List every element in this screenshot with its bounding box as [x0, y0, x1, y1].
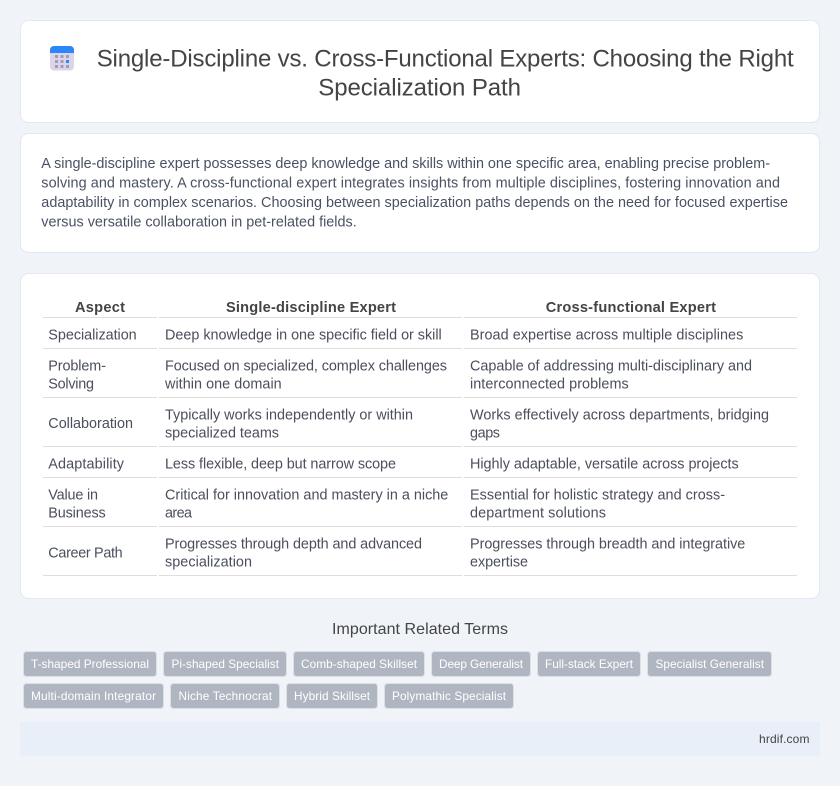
table row: Value in Business: Business — [48, 505, 106, 521]
chip: Pi-shaped Specialist: Pi-shaped Specialist — [172, 657, 280, 671]
table row: Problem-Solving: Problem- — [48, 358, 106, 374]
table row: Career Path: specialization — [165, 554, 252, 570]
table header row: Aspect — [75, 300, 125, 316]
chip: Polymathic Specialist — [384, 684, 514, 708]
table row: Problem-Solving: Focused on specialized, complex challenges — [165, 358, 447, 374]
table row: Career Path: Progresses through breadth and integrative — [470, 536, 745, 552]
text block: introduction paragraph: A single-discipline expert possesses deep knowledge and skills within one specific area, enabling precise problem- — [41, 156, 770, 172]
heading: Important Related Terms: Important Related Terms — [332, 621, 508, 638]
table row: Adaptability: Highly adaptable, versatile across projects — [470, 456, 739, 472]
chip: T-shaped Professional: T-shaped Professional — [31, 657, 149, 671]
text block: introduction paragraph: versus versatile collaboration in pet-related fields. — [41, 214, 357, 230]
title: Single-Discipline vs. Cross-Functional Experts: Choosing the Right — [97, 46, 794, 72]
table row: Value in Business: Essential for holistic strategy and cross- — [470, 487, 725, 503]
panel: introduction — [20, 134, 820, 252]
icon: calendar — [50, 46, 74, 70]
title — [97, 46, 794, 102]
table row: Specialization: Deep knowledge in one specific field or skill — [165, 327, 442, 343]
chip: Deep Generalist — [432, 652, 530, 676]
text block: introduction paragraph: adaptability in complex scenarios. Choosing between specialization paths depends on the need for focused expertise — [41, 195, 788, 211]
chip: Multi-domain Integrator — [24, 684, 164, 708]
table header row — [43, 300, 797, 318]
chip: Multi-domain Integrator: Multi-domain Integrator — [31, 689, 156, 703]
chip: Full-stack Expert: Full-stack Expert — [545, 657, 634, 671]
text block: introduction paragraph: solving and mastery. A cross-functional expert integrates insights from multiple disciplines, fostering innovation and — [41, 176, 780, 192]
table row: Value in Business: area — [165, 505, 192, 521]
chip: Full-stack Expert — [538, 652, 640, 676]
table row: Collaboration: gaps — [470, 425, 500, 441]
table row: Problem-Solving — [43, 358, 797, 398]
panel: header — [20, 20, 820, 122]
table row: Specialization — [43, 327, 797, 349]
table row: Collaboration: Typically works independently or within — [165, 407, 413, 423]
chip: Specialist Generalist: Specialist Generalist — [656, 657, 765, 671]
table row: Problem-Solving: Capable of addressing multi-disciplinary and — [470, 358, 752, 374]
table row: Specialization: Broad expertise across multiple disciplines — [470, 327, 743, 343]
table row: Value in Business: department solutions — [470, 505, 606, 521]
table row: Problem-Solving: within one domain — [164, 376, 282, 392]
table row: Collaboration: specialized teams — [165, 425, 279, 441]
chip: Niche Technocrat — [170, 684, 280, 708]
table row: Specialization: Specialization — [48, 327, 137, 343]
title: Specialization Path — [318, 74, 521, 102]
table row: Problem-Solving: Solving — [48, 376, 94, 392]
table row: Career Path: Progresses through depth and advanced — [165, 536, 422, 552]
table row: Adaptability — [43, 456, 797, 478]
text block: introduction paragraph — [41, 156, 788, 230]
chip: Niche Technocrat: Niche Technocrat — [178, 689, 273, 703]
table row: Adaptability: Adaptability — [48, 456, 125, 472]
table row: Value in Business: Critical for innovation and mastery in a niche — [165, 487, 448, 503]
chip: Comb-shaped Skillset: Comb-shaped Skillset — [301, 657, 418, 671]
chip: Polymathic Specialist: Polymathic Specialist — [392, 689, 507, 703]
footer band — [20, 722, 820, 756]
table row: Collaboration: Collaboration — [48, 416, 133, 432]
table header row: Single-discipline Expert — [226, 300, 396, 316]
chip: T-shaped Professional — [24, 652, 156, 676]
chip: Hybrid Skillset: Hybrid Skillset — [294, 689, 371, 703]
footer text: hrdif.com: hrdif.com — [759, 732, 810, 746]
chip: Pi-shaped Specialist — [164, 652, 286, 676]
table row: Problem-Solving: interconnected problems — [470, 376, 629, 392]
table header row: Cross-functional Expert — [546, 300, 716, 316]
table row: Career Path: expertise — [470, 554, 528, 570]
related term chips — [24, 652, 772, 708]
table row: Adaptability: Less flexible, deep but narrow scope — [165, 456, 396, 472]
chip: Comb-shaped Skillset — [294, 652, 424, 676]
chip: Specialist Generalist — [648, 652, 772, 676]
table row: Collaboration: Works effectively across departments, bridging — [470, 407, 769, 423]
table row: Value in Business — [43, 487, 797, 527]
table row: Collaboration — [43, 407, 797, 447]
chip: Deep Generalist: Deep Generalist — [439, 657, 524, 671]
table row: Career Path — [43, 536, 797, 576]
panel: comparison table — [20, 274, 820, 598]
chip: Hybrid Skillset — [286, 684, 378, 708]
table row: Career Path: Career Path — [48, 545, 123, 561]
table row: Value in Business: Value in — [48, 487, 98, 503]
